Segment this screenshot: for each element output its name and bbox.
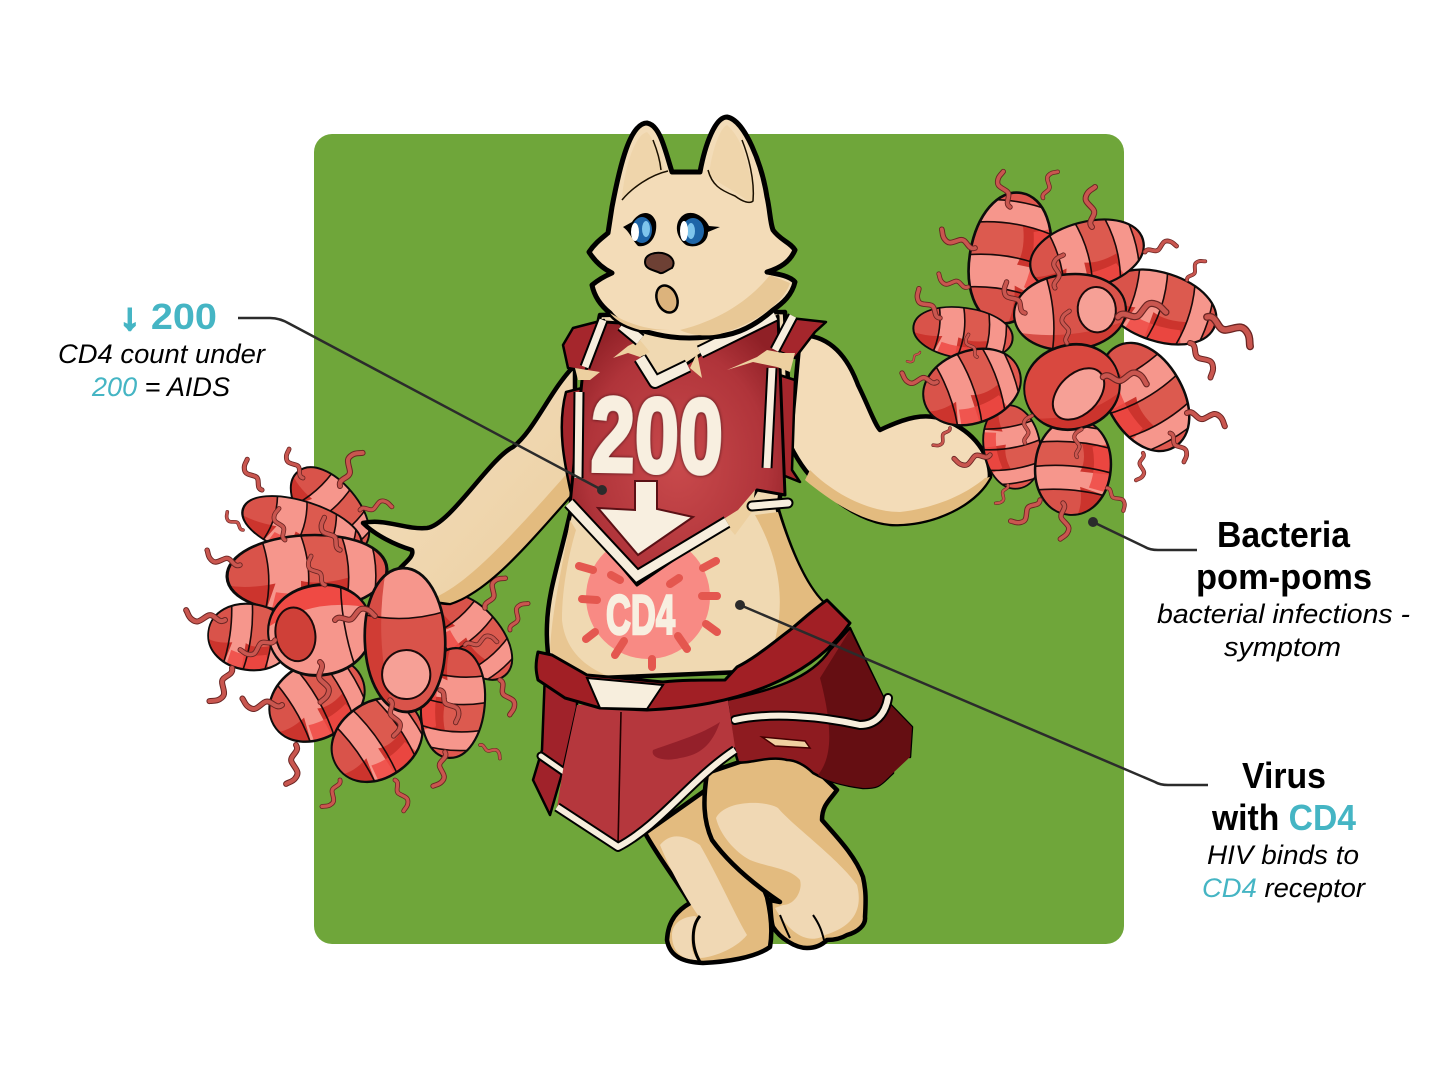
bacterium [1024, 411, 1122, 523]
head outline [589, 117, 795, 338]
number 200: 200 [590, 376, 724, 496]
right pom-pom [901, 169, 1256, 539]
bacterium [217, 524, 397, 622]
callout: CD4 under 200: CD4 count under [58, 339, 266, 369]
jersey body [570, 316, 785, 585]
right eye [677, 213, 720, 246]
green background panel [314, 134, 1124, 944]
left eye [623, 213, 656, 246]
bacterium [904, 296, 1022, 370]
bacterium [906, 329, 1038, 445]
bacterium [247, 634, 387, 766]
right ear lines [708, 140, 753, 202]
bacterium [1087, 249, 1233, 365]
bacterium, end on [1010, 333, 1136, 448]
skirt [533, 600, 912, 847]
virus with CD4 on belly [579, 535, 717, 667]
bacterium, end on [1005, 263, 1135, 361]
left strap [533, 672, 577, 815]
bacterium, dark cap [255, 568, 385, 692]
cream straps [578, 316, 793, 478]
bacterium [308, 674, 446, 806]
bacterium [972, 396, 1052, 498]
skirt front [557, 700, 735, 847]
leotard jersey [562, 315, 826, 585]
left frill [562, 320, 604, 498]
bacterium [951, 178, 1069, 338]
white underwear [587, 678, 663, 709]
callout: bacteria pom-poms [1157, 514, 1410, 662]
tear in skirt [762, 737, 810, 748]
collar [622, 315, 775, 382]
torn skin patches [575, 340, 795, 535]
skirt trim [735, 698, 888, 725]
left ear lines [622, 140, 668, 200]
left pom-pom, back bacteria [269, 447, 534, 700]
left arm [363, 365, 575, 603]
callout: virus with CD4: HIV binds to [1207, 840, 1359, 870]
bacterium [1075, 320, 1215, 474]
front leg [704, 745, 866, 948]
left pom-pom, front bacteria [184, 459, 518, 811]
callout: virus with CD4: Virus [1242, 755, 1326, 796]
callout: virus with CD4: with CD4 [1211, 797, 1356, 838]
V trim [569, 503, 727, 576]
down arrow [598, 481, 693, 555]
right tails [901, 169, 1256, 539]
inner right ear [709, 125, 754, 203]
waist band [536, 600, 850, 710]
bacterium [269, 447, 391, 573]
callout: bacteria pom-poms: bacterial infections - [1157, 599, 1410, 629]
virus spikes [579, 561, 717, 667]
back leg [645, 780, 771, 963]
leader line: virus [735, 600, 1208, 785]
leader line: 200 [238, 318, 607, 495]
bacterium [411, 639, 495, 767]
skirt right panel [727, 628, 912, 788]
skirt fold [653, 722, 720, 760]
strap band [541, 756, 564, 772]
bacterium [199, 592, 301, 682]
right trim [752, 503, 788, 506]
leader line: bacteria [1088, 517, 1197, 550]
callout: virus with CD4: CD4 receptor [1202, 873, 1366, 903]
inner left ear [622, 132, 664, 198]
head [589, 117, 795, 338]
callout: bacteria pom-poms: Bacteria [1217, 514, 1351, 555]
skirt white trim [557, 750, 735, 847]
bacterium [412, 574, 534, 700]
left tails [184, 459, 518, 811]
bacterium, end on [355, 559, 455, 721]
bacterium [228, 478, 376, 578]
callout: CD4 under 200 [58, 296, 266, 402]
bacterium [1015, 201, 1159, 309]
callout: bacteria pom-poms: symptom [1224, 632, 1341, 662]
cat cheerleader [363, 117, 990, 963]
right arm [790, 335, 990, 524]
right frill [770, 318, 826, 482]
mouth [652, 282, 682, 316]
callout: virus with CD4 [1202, 755, 1366, 903]
torso [547, 312, 823, 680]
nose [645, 253, 674, 273]
face shading [610, 275, 790, 335]
callout: CD4 under 200: 200 = AIDS [91, 372, 230, 402]
CD4 label: CD4 [606, 583, 675, 646]
skirt dark shading [818, 630, 912, 788]
callout: CD4 under 200: ↓ 200 [120, 296, 217, 337]
callout: bacteria pom-poms: pom-poms [1196, 556, 1372, 597]
